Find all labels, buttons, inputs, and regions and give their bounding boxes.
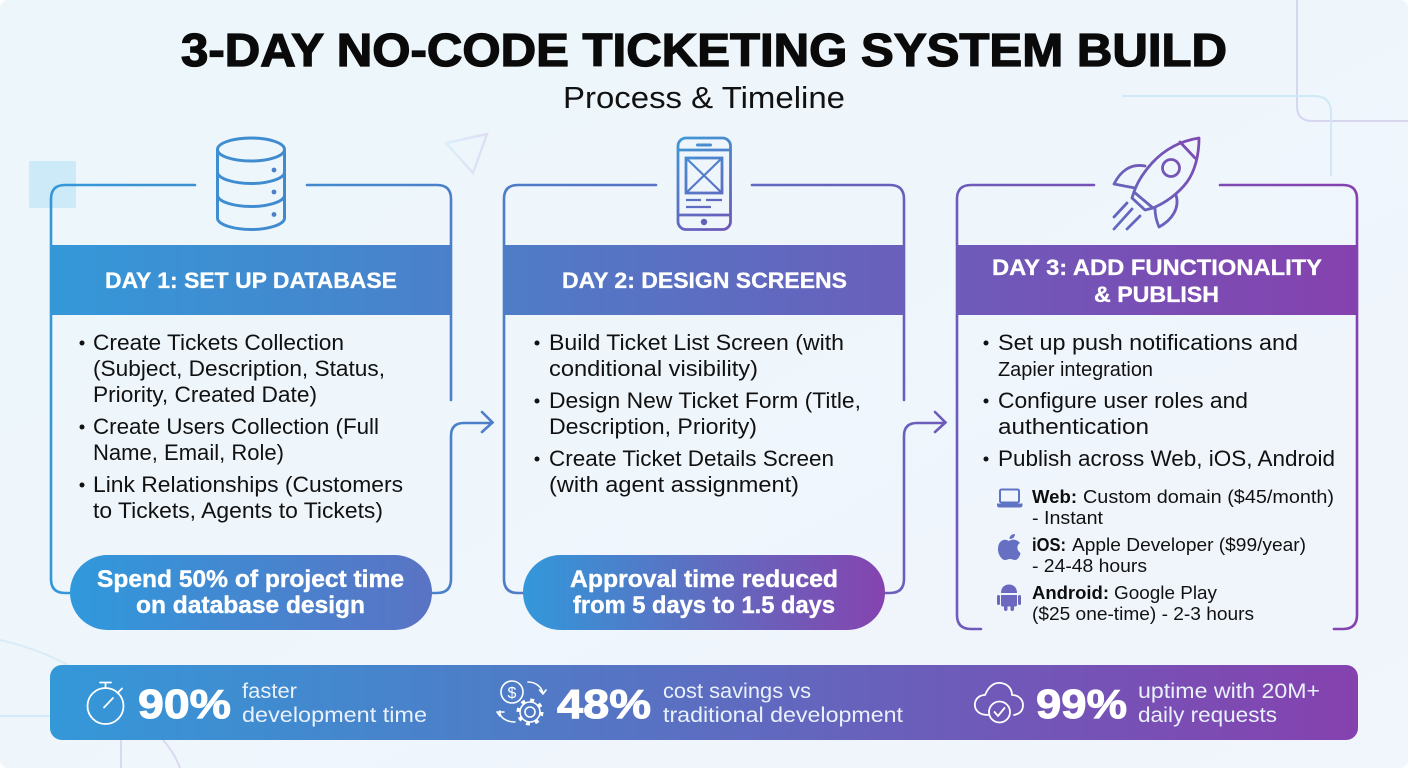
callout: approval time: from 5 days to 1.5 days — [573, 592, 835, 619]
stat: 99%: daily requests — [1138, 704, 1277, 727]
bullet list: day 3: Set up push notifications and — [998, 330, 1298, 355]
panel outline — [957, 185, 1357, 629]
icon: laptop — [997, 490, 1022, 508]
panel: day 1 — [51, 138, 492, 630]
text: web: - Instant — [1032, 508, 1103, 528]
bullet list: day 1: to Tickets, Agents to Tickets) — [93, 498, 383, 523]
stat: 99% — [1036, 680, 1320, 727]
icon: android — [997, 584, 1021, 611]
icon: database — [218, 138, 284, 230]
header: day 2: DAY 2: DESIGN SCREENS — [562, 268, 847, 293]
text: ios — [1032, 535, 1306, 576]
header: day 1 — [51, 245, 451, 315]
header: day 2 — [504, 245, 904, 315]
header: day 3 — [957, 245, 1357, 315]
callout: database time: on database design — [136, 592, 365, 619]
icon: phone wireframe — [678, 138, 730, 230]
bullet list: day 3: Publish across Web, iOS, Android — [998, 446, 1335, 471]
title: 3-DAY NO-CODE TICKETING SYSTEM BUILD — [181, 24, 1227, 76]
text: android: Android: — [1032, 583, 1109, 603]
text: web — [1032, 487, 1334, 528]
text: ios: iOS: — [1032, 535, 1066, 555]
header: day 3: & PUBLISH — [1094, 282, 1219, 307]
icon: cost and gear — [497, 681, 546, 724]
text: android: Google Play — [1114, 583, 1217, 603]
icon: stopwatch — [88, 682, 124, 724]
icon: cloud check — [975, 683, 1023, 722]
header: day 1: DAY 1: SET UP DATABASE — [105, 268, 397, 293]
stat: 48% — [557, 680, 903, 727]
text: ios: Apple Developer ($99/year) — [1072, 535, 1306, 555]
stat: 90%: 90% — [138, 681, 231, 727]
stat: 48%: cost savings vs — [663, 680, 811, 703]
stat: 48%: traditional development — [663, 704, 903, 727]
subtitle: Process & Timeline — [563, 80, 845, 115]
stat: 99%: 99% — [1036, 681, 1127, 727]
bullet list: day 2: Design New Ticket Form (Title, — [549, 388, 861, 413]
bullet list: day 1: Create Users Collection (Full — [93, 414, 379, 439]
stat: 90%: faster — [242, 680, 297, 703]
bullet list: day 1: Priority, Created Date) — [93, 382, 317, 407]
icon: cost and gear: $ — [508, 685, 517, 702]
bullet list: day 3 — [984, 330, 1335, 471]
text: android — [1032, 583, 1254, 624]
stat: 99%: uptime with 20M+ — [1138, 680, 1320, 703]
bullet list: day 2 — [534, 330, 861, 497]
text: android: ($25 one-time) - 2-3 hours — [1032, 604, 1254, 624]
callout: database time — [70, 555, 432, 630]
bullet list: day 1: Name, Email, Role) — [93, 440, 284, 465]
bullet list: day 1: Create Tickets Collection — [93, 330, 344, 355]
stats bar — [50, 665, 1358, 740]
bullet list: day 3: Zapier integration — [998, 358, 1153, 381]
callout: database time: Spend 50% of project time — [97, 566, 404, 593]
text: web: Web: — [1032, 487, 1077, 507]
bullet list: day 2: (with agent assignment) — [549, 472, 799, 497]
header: day 3: DAY 3: ADD FUNCTIONALITY — [992, 255, 1322, 280]
bullet list: day 2: conditional visibility) — [549, 356, 758, 381]
bullet list: day 3: Configure user roles and — [998, 388, 1248, 413]
callout: approval time: Approval time reduced — [570, 566, 838, 593]
panel: day 3 — [957, 138, 1357, 629]
bullet list: day 2: Build Ticket List Screen (with — [549, 330, 844, 355]
bullet list: day 2: Create Ticket Details Screen — [549, 446, 834, 471]
callout: approval time — [523, 555, 885, 630]
bullet list: day 3: authentication — [998, 414, 1149, 439]
bullet list: day 1: (Subject, Description, Status, — [93, 356, 385, 381]
panel: day 2 — [504, 138, 946, 630]
panel outline with arrow to day 2 — [51, 185, 492, 593]
stat: 48%: 48% — [557, 681, 651, 727]
bullet list: day 2: Description, Priority) — [549, 414, 757, 439]
bullet list: day 1: Link Relationships (Customers — [93, 472, 403, 497]
text: web: Custom domain ($45/month) — [1083, 487, 1334, 507]
bullet list: day 1 — [80, 330, 403, 523]
text: ios: - 24-48 hours — [1032, 556, 1147, 576]
icon: apple — [998, 534, 1020, 560]
stat: 90%: development time — [242, 704, 427, 727]
stat: 90% — [138, 680, 427, 727]
icon: rocket — [1114, 138, 1199, 229]
panel outline with arrow to day 3 — [504, 185, 946, 593]
